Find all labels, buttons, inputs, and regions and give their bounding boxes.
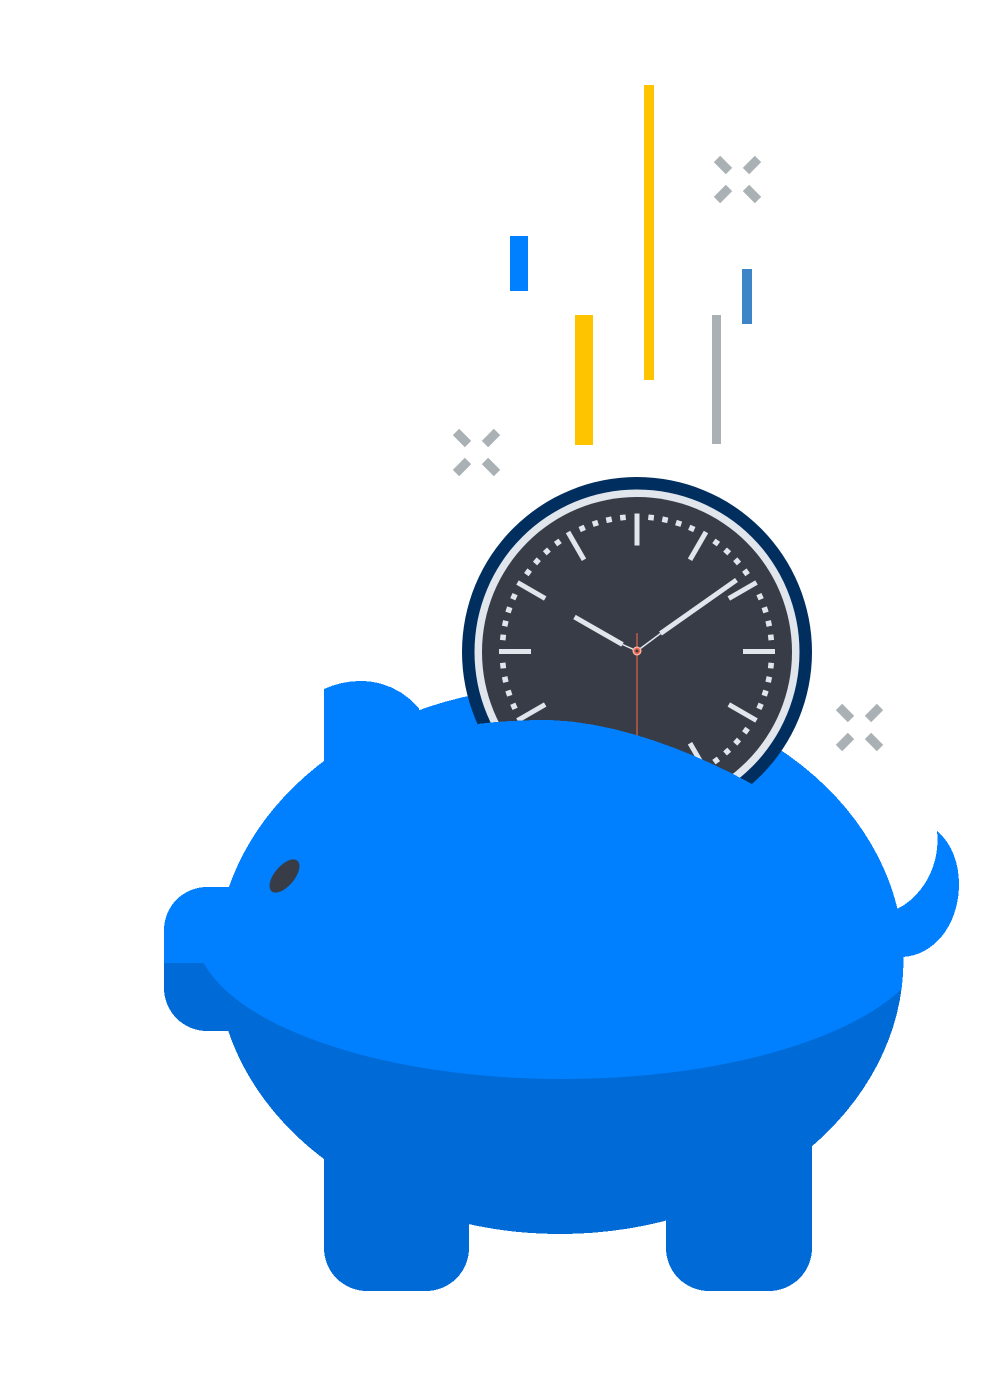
falling bar: tall gold: [644, 85, 654, 380]
falling bar: short gold: [575, 315, 593, 445]
clock face: [482, 497, 792, 807]
clock coin: [462, 477, 812, 827]
illustration: piggy bank saving time: [164, 85, 959, 1291]
falling bar: blue: [510, 236, 528, 291]
clock rim: [462, 477, 812, 827]
second hand: [636, 633, 638, 743]
center pin: [632, 646, 642, 656]
pig body: shaded lower part: [164, 686, 904, 1291]
falling bar: steel blue: [742, 269, 752, 324]
pig back covering the coin slot: [470, 720, 760, 900]
pig body: light upper part: [164, 696, 904, 1079]
sparkle: right of clock: [836, 704, 883, 751]
hour hand: [574, 617, 637, 651]
clock inner ring: [474, 490, 800, 814]
minute hand: [637, 580, 736, 651]
hour ticks: [499, 514, 775, 772]
pig tail: [895, 831, 959, 957]
sparkle: left of clock: [453, 429, 500, 476]
minute dots: [500, 514, 774, 764]
sparkle: top right: [714, 156, 761, 203]
pig eye: [264, 854, 305, 898]
pig ear: [324, 681, 420, 780]
falling bar: grey: [712, 315, 721, 444]
